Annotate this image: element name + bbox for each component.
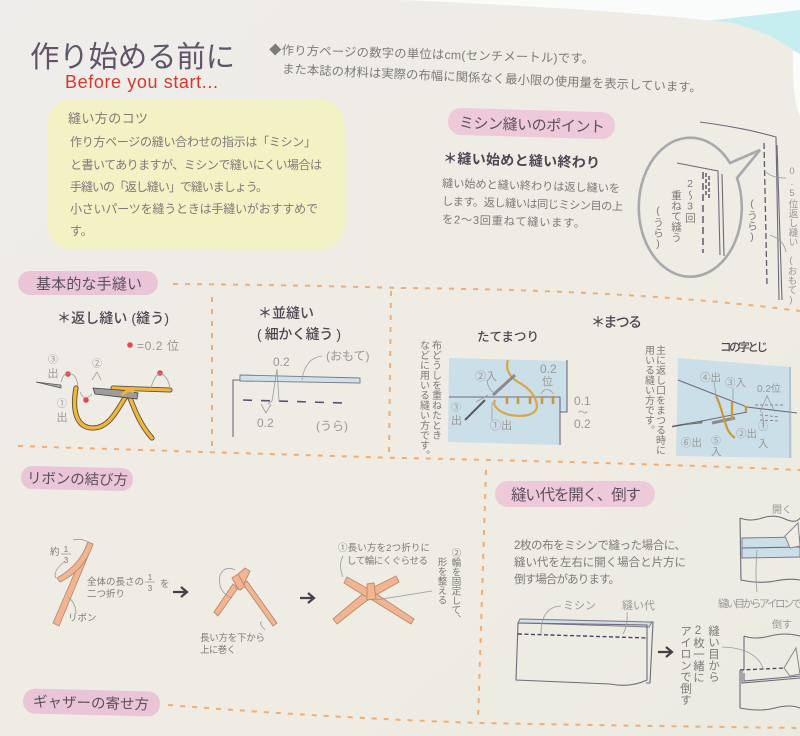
tied bow [333, 593, 369, 624]
usage note [418, 340, 442, 460]
subtitle: Before you start... [65, 72, 218, 92]
fabric diagram: 0.2 [257, 416, 274, 430]
subheading: start and end of stitching: ＊縫い始めと縫い終わり [443, 150, 600, 171]
thread and needle illustration [36, 370, 170, 438]
panel: running stitch: ( 細かく縫う ) [257, 326, 341, 342]
arrow [173, 587, 187, 597]
vertical blind stitch heading: たてまつり [477, 330, 539, 344]
step 1 labels: 二つ折り [87, 588, 125, 600]
machine sewing text: します。返し縫いは同じミシン目の上 [442, 194, 623, 213]
ladder stitch illustration: 0.2位 [757, 382, 781, 395]
backstitch heading: ＊返し縫い (縫う) [57, 310, 169, 326]
legend: red dot equals 0.2: =0.2 位 [137, 339, 179, 353]
blind stitch illustration: 位 [542, 375, 553, 388]
running stitch heading: ＊並縫い [258, 305, 314, 321]
step 2 label: 長い方を下から [200, 632, 265, 644]
usage note: 布どうしを重ねたとき [430, 340, 442, 440]
step 2 label: 上に巻く [200, 644, 236, 656]
ladder stitch illustration: 入 [758, 438, 769, 450]
diagram: pressed seam with iron: 倒す [772, 618, 792, 631]
step 3 labels: 形を整える [436, 556, 447, 604]
pressing instructions [679, 624, 720, 706]
heading: open and press seam allowance [495, 481, 655, 507]
ladder stitch illustration: ④出 [700, 372, 721, 384]
machine sewing text: 縫い始めと縫い終わりは返し縫いを [442, 176, 620, 195]
usage note: 用いる縫い方です。 [642, 345, 654, 435]
blind stitch illustration: 0.1 [574, 394, 591, 408]
step labels: 出 [48, 367, 58, 380]
step labels: 出 [56, 411, 68, 424]
pressing instructions: 2枚一緒に [692, 625, 705, 683]
step 1 labels: 約 [50, 546, 60, 558]
arrow [300, 593, 314, 603]
seam allowance text: 縫い代を左右に開く場合と片方に [514, 555, 686, 569]
diagram: pressed seam with iron [722, 618, 800, 710]
usage note: 主に返し口をまつる時に [654, 345, 666, 455]
panel: sewing tips [47, 99, 345, 250]
panel heading: 縫い方のコツ [68, 111, 148, 126]
arrow [658, 647, 672, 657]
ladder stitch illustration: 入 [711, 446, 722, 458]
tips text [70, 134, 322, 238]
ladder stitch illustration: ③入 [725, 377, 746, 389]
fabric diagram: (うら) [316, 419, 348, 433]
seam allowance text: 2枚の布をミシンで縫った場合に、 [514, 538, 686, 552]
blind stitch illustration: 0.2 [574, 417, 591, 431]
step 1 labels: 1 [64, 545, 69, 554]
diagram: machine stitched fabric [516, 598, 655, 685]
tips text: す。 [70, 224, 93, 238]
diagram: machine stitched fabric: ミシン [563, 600, 596, 612]
step 3 labels: ①長い方を2つ折りに [338, 542, 430, 554]
heading: machine sewing points: ミシン縫いのポイント [459, 115, 605, 136]
diagram: backstitch zoom bubble: (うら) [652, 205, 664, 250]
ladder stitch illustration: ① [758, 421, 768, 433]
blind stitch illustration: 出 [451, 414, 462, 427]
step labels: ③ [48, 354, 58, 366]
blind stitch illustration: 〜 [578, 408, 588, 419]
diagram: opened seam with iron: 開く [772, 504, 792, 516]
panel: blind stitch heading: ＊まつる [591, 314, 642, 330]
ladder stitch illustration: ②出 [736, 428, 757, 440]
step 3 labels: して輪にくぐらせる [347, 555, 428, 567]
diagram: backstitch zoom bubble [639, 122, 798, 306]
panel: ribbon step 2 [200, 568, 277, 656]
step 3 labels: ②輪を固定して、 [450, 548, 461, 624]
step 1 labels [50, 545, 170, 624]
panel: backstitch [36, 310, 179, 438]
panel: ribbon step 3 [333, 542, 461, 624]
diagram: backstitch zoom bubble: 重ねて縫う [670, 189, 682, 242]
blind stitch illustration [448, 358, 591, 445]
unit note: ◆作り方ページの数字の単位はcm(センチメートル)です。 [269, 42, 594, 66]
heading: how to tie a ribbon: リボンの結び方 [27, 470, 128, 489]
step 1 labels: 3 [148, 584, 153, 593]
usage note [642, 345, 666, 455]
heading: open and press seam allowance: 縫い代を開く、倒す [511, 486, 641, 504]
seam allowance text: 倒す場合があります。 [514, 572, 620, 586]
title: 作り始める前に [30, 41, 235, 74]
heading: how to tie a ribbon [21, 466, 133, 491]
machine sewing text: を2〜3回重ねて縫います。 [442, 212, 585, 230]
panel: ribbon step 1 [50, 539, 170, 626]
heading: how to gather [23, 688, 160, 717]
ladder stitch heading: コの字とじ [720, 341, 768, 354]
step 1 labels: リボン [68, 613, 97, 624]
blind stitch illustration: ③ [451, 402, 461, 414]
ladder stitch illustration: ⑤ [711, 435, 721, 447]
fabric diagram: 0.2 [273, 355, 290, 369]
diagram: backstitch zoom bubble: (おもて) [786, 255, 797, 306]
pressing instructions: アイロンで倒す [679, 625, 692, 706]
tips text: 手縫いの「返し縫い」で縫いましょう。 [70, 179, 268, 194]
diagram: opened seam with iron [718, 504, 800, 610]
step 2 label [200, 632, 265, 656]
heading: how to gather: ギャザーの寄せ方 [33, 694, 149, 713]
blind stitch illustration: ①出 [490, 419, 512, 432]
blind stitch illustration: 0.2 [540, 362, 557, 376]
unit note: また本誌の材料は実際の布幅に関係なく最小限の使用量を表示しています。 [282, 61, 702, 95]
diagram: machine stitched fabric: 縫い代 [622, 598, 655, 612]
ladder stitch illustration: ⑥出 [681, 437, 702, 449]
heading: basic hand sewing: 基本的な手縫い [36, 276, 142, 293]
panel: running stitch [233, 305, 370, 437]
tips text: と書いてありますが、ミシンで縫いにくい場合は [70, 157, 322, 172]
fabric diagram: (おもて) [326, 349, 370, 363]
machine sewing text [442, 176, 623, 230]
step 1 labels: 1 [148, 573, 153, 582]
heading: machine sewing points [448, 108, 615, 140]
unit note [269, 42, 702, 95]
diagram: backstitch zoom bubble: 0.5位返し縫い [786, 166, 798, 246]
panel: vertical blind stitch [418, 330, 591, 460]
seam allowance text [514, 538, 686, 586]
speech bubble [639, 138, 760, 277]
usage note: などに用いる縫い方です。 [418, 340, 430, 460]
step 1 labels: 3 [64, 556, 69, 565]
step labels: ① [57, 398, 67, 410]
step labels: ② [92, 358, 102, 370]
panel: ladder stitch [642, 341, 797, 458]
dashed panel dividers [18, 284, 800, 728]
step labels [48, 354, 102, 424]
step 1 labels: 全体の長さの [87, 576, 144, 588]
half-tied ribbon [214, 584, 238, 616]
heading: basic hand sewing [18, 271, 158, 295]
ladder stitch illustration [672, 358, 797, 458]
fabric diagram [233, 349, 370, 437]
tips text: 作り方ページの縫い合わせの指示は「ミシン」 [70, 134, 316, 149]
pressing instructions: 縫い目から [707, 624, 720, 682]
step 1 labels: を [160, 579, 170, 590]
folded ribbon [53, 542, 93, 626]
diagram: backstitch zoom bubble: (うら) [746, 198, 758, 243]
tips text: 小さいパーツを縫うときは手縫いがおすすめで [70, 201, 318, 216]
blind stitch illustration: ②入 [475, 370, 497, 383]
step 3 labels [338, 542, 461, 624]
diagram: backstitch zoom bubble: 2〜3回 [684, 178, 696, 224]
diagram: opened seam with iron: 縫い目からアイロンで [718, 597, 800, 610]
